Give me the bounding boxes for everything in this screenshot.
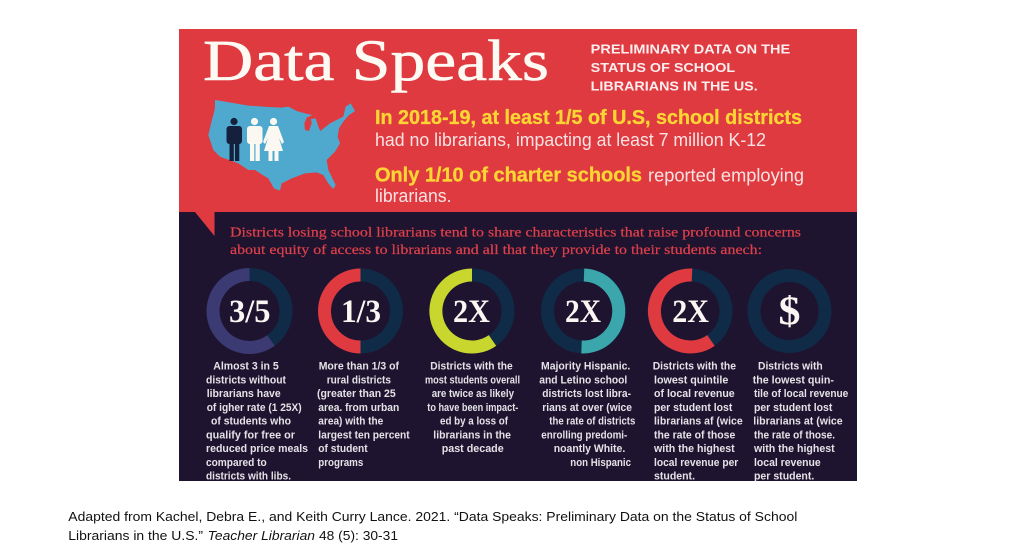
stat ring: 2X lime: 2X <box>453 294 490 330</box>
caption: 2X red: of local revenue <box>654 388 735 400</box>
key facts: Only 1/10 of charter schools <box>375 164 642 186</box>
caption: dollar: local revenue <box>754 457 821 469</box>
subtitle: LIBRARIANS IN THE US. <box>591 78 758 94</box>
caption: 2X teal: and Letino school <box>539 374 627 386</box>
caption: 2X teal: noantly White. <box>554 443 625 455</box>
caption: 2X lime: librarians in the <box>433 429 511 441</box>
caption: 2X lime: most students overall <box>425 374 520 386</box>
stat ring: dollar <box>754 276 825 346</box>
caption: 2X teal: Majority Hispanic. <box>541 360 630 372</box>
caption: 2X lime: past decade <box>442 443 504 455</box>
caption: 2X red: student. <box>654 471 695 483</box>
intro statement: Districts losing school librarians tend to share characteristics that raise profound concerns <box>230 226 801 240</box>
caption: 2X teal: districts lost libra- <box>542 388 631 400</box>
caption: 2X red: lowest quintile <box>654 374 728 386</box>
source citation <box>68 510 797 543</box>
caption: dollar: librarians at (wice <box>753 416 843 428</box>
caption: dollar: Districts with <box>758 360 823 372</box>
caption: 2X lime: are twice as likely <box>432 388 515 400</box>
caption: 1/3: largest ten percent <box>318 429 410 441</box>
caption: 2X teal: enrolling predomi- <box>541 429 628 441</box>
caption: 1/3 <box>317 360 410 469</box>
key facts <box>375 107 804 206</box>
caption: 1/3: rural districts <box>327 374 391 386</box>
stat captions <box>206 360 848 483</box>
subtitle <box>591 42 791 94</box>
caption: 2X teal: non Hispanic <box>570 457 631 469</box>
callout pointer <box>195 212 214 236</box>
caption: 1/3: area. from urban <box>318 402 400 414</box>
caption: 2X lime: ed by a loss of <box>440 416 508 428</box>
stat ring: 2X teal <box>548 275 620 347</box>
caption: 1/3: More than 1/3 of <box>319 360 399 372</box>
caption: 3/5: compared to <box>206 457 267 469</box>
source citation: Teacher Librarian <box>208 529 315 543</box>
stat ring: 3/5: 3/5 <box>229 294 270 330</box>
stat ring: 2X red: 2X <box>672 294 709 330</box>
intro statement <box>230 226 801 258</box>
caption: 1/3: area) with the <box>318 416 383 428</box>
caption: dollar: the lowest quin- <box>753 374 834 386</box>
subtitle: STATUS OF SCHOOL <box>591 60 735 75</box>
caption: 2X red: librarians af (wice <box>654 416 743 428</box>
intro statement: about equity of access to librarians and all that they provide to their students anech: <box>230 243 762 258</box>
caption: 3/5 <box>206 360 308 483</box>
caption: 3/5: qualify for free or <box>206 429 296 441</box>
caption: dollar <box>753 360 848 483</box>
stat ring: 2X lime <box>436 275 508 347</box>
icon: woman white <box>263 118 284 161</box>
caption: dollar: per student. <box>754 471 814 483</box>
stat ring: 1/3: 1/3 <box>341 294 381 330</box>
stat ring: dollar: $ <box>778 288 800 333</box>
caption: 3/5: Almost 3 in 5 <box>213 360 279 372</box>
caption: dollar: tile of local revenue <box>754 388 848 400</box>
caption: dollar: the rate of those. <box>754 429 835 441</box>
stat ring: 3/5 <box>213 274 286 348</box>
panel: red header <box>179 29 857 212</box>
caption: 2X teal: rians at over (wice <box>542 402 632 414</box>
caption: 2X lime <box>425 360 520 455</box>
title: Data Speaks <box>203 28 549 93</box>
source citation: Adapted from Kachel, Debra E., and Keith Curry Lance. 2021. “Data Speaks: Preliminary Data on the Status of School <box>68 510 797 524</box>
caption: 2X lime: Districts with the <box>430 360 513 372</box>
caption: 2X teal: the rate of districts <box>549 416 635 428</box>
caption: 3/5: of students who <box>211 416 291 428</box>
caption: 2X red: per student lost <box>654 402 733 414</box>
caption: 2X red <box>653 360 743 483</box>
caption: 3/5: districts with libs. <box>206 471 291 483</box>
caption: 3/5: librarians have <box>207 388 281 400</box>
caption: dollar: with the highest <box>753 443 835 455</box>
caption: 1/3: programs <box>318 457 363 469</box>
caption: 2X red: local revenue per <box>654 457 739 469</box>
caption: 3/5: districts without <box>206 374 286 386</box>
caption: 2X lime: to have been impact- <box>427 402 519 414</box>
caption: 2X red: Districts with the <box>653 360 736 372</box>
key facts: reported employing <box>648 166 804 186</box>
stat ring: 2X red <box>654 275 726 347</box>
source citation: 48 (5): 30-31 <box>319 529 398 543</box>
caption: 2X red: the rate of those <box>654 429 735 441</box>
caption: 1/3: of student <box>318 443 368 455</box>
caption: 2X teal <box>539 360 635 469</box>
key facts: In 2018-19, at least 1/5 of U.S, school districts <box>375 107 802 129</box>
key facts: librarians. <box>375 186 452 206</box>
caption: 3/5: of igher rate (1 25X) <box>207 402 302 414</box>
key facts: had no librarians, impacting at least 7 million K-12 <box>375 130 766 150</box>
caption: dollar: per student lost <box>754 402 833 414</box>
icon: man white <box>247 118 262 161</box>
caption: 3/5: reduced price meals <box>206 443 308 455</box>
source citation: Librarians in the U.S.” <box>68 529 203 543</box>
panel: dark lower section <box>179 212 857 481</box>
subtitle: PRELIMINARY DATA ON THE <box>591 42 791 56</box>
icon: US map with people <box>208 100 355 191</box>
stat ring: 2X teal: 2X <box>565 294 601 330</box>
caption: 1/3: (greater than 25 <box>317 388 396 400</box>
caption: 2X red: with the highest <box>653 443 735 455</box>
icon: man dark <box>226 118 242 161</box>
stat ring: 1/3 <box>324 275 396 347</box>
